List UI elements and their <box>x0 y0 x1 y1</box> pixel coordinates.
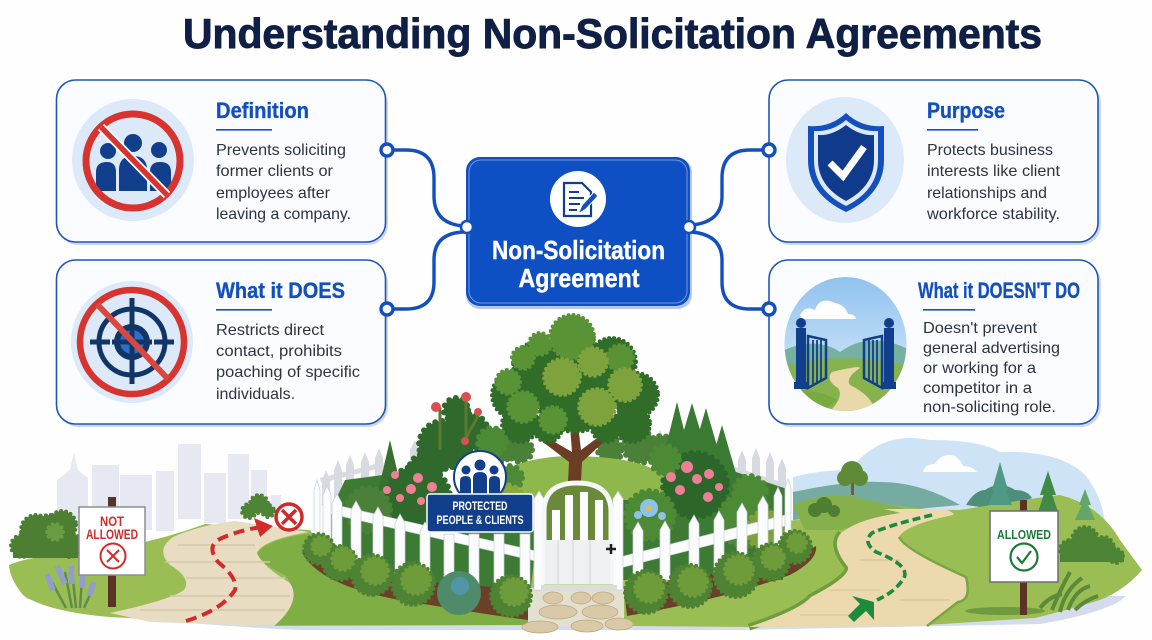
text: what it does body: individuals. <box>216 386 295 403</box>
heading: what it does: What it DOES <box>216 278 345 303</box>
heading: purpose: Purpose <box>927 98 1005 123</box>
lavender <box>47 566 94 608</box>
text: what it doesn't do body: Doesn't prevent <box>923 320 1038 337</box>
garden fill behind fence <box>330 460 790 605</box>
panel: what it doesn't do <box>769 260 1101 427</box>
sign: allowed: ALLOWED <box>997 527 1051 542</box>
sign: protected people and clients: PROTECTED <box>452 501 508 513</box>
panel: center agreement <box>461 157 695 309</box>
text: what it does body: Restricts direct <box>216 322 325 339</box>
text: what it doesn't do body: general advertising <box>923 340 1060 357</box>
path: right walkway <box>749 509 968 627</box>
plant: right bushes <box>626 491 783 548</box>
city skyline <box>57 444 281 531</box>
title: Understanding Non-Solicitation Agreements <box>183 10 1042 57</box>
text: definition body <box>216 142 351 223</box>
landscape: right details <box>749 461 1124 627</box>
arrow: red dashed <box>186 518 273 621</box>
mulch bed <box>302 546 816 620</box>
gate posts <box>794 318 896 389</box>
text: what it doesn't do body: non-soliciting role. <box>923 399 1056 416</box>
stepping stones <box>522 592 633 633</box>
tree foliage <box>492 315 658 442</box>
landscape: left details <box>11 495 530 626</box>
flowers: pink left <box>383 471 437 505</box>
text: purpose body: workforce stability. <box>926 206 1060 223</box>
bush small <box>242 495 274 518</box>
connector nodes <box>381 144 775 315</box>
connectors <box>392 150 764 309</box>
sign: not allowed <box>79 497 145 607</box>
sign: allowed <box>990 500 1058 615</box>
back shrubs <box>481 431 676 464</box>
text: purpose body <box>926 142 1061 223</box>
arrow: green dashed <box>848 515 932 622</box>
text: what it does body <box>216 322 360 403</box>
text: what it doesn't do body: competitor in a <box>923 380 1032 397</box>
text: purpose body: interests like client <box>927 163 1061 180</box>
icon: document and pen <box>550 171 606 227</box>
heading: center label <box>492 235 665 293</box>
heading: center label: Agreement <box>518 263 640 293</box>
text: what it does body: poaching of specific <box>216 364 360 381</box>
text: purpose body: Protects business <box>927 142 1053 159</box>
text: definition body: former clients or <box>216 163 334 180</box>
text: definition body: employees after <box>216 185 331 202</box>
icon: open gate <box>784 277 906 411</box>
plant: fern <box>651 402 766 517</box>
white fence <box>314 479 791 590</box>
stone area <box>528 588 624 626</box>
trees and bushes <box>808 461 1124 615</box>
text: definition body: Prevents soliciting <box>216 142 346 159</box>
text: what it does body: contact, prohibits <box>216 343 342 360</box>
landscape: sky and far hills right <box>793 438 1105 530</box>
text: purpose body: relationships and <box>927 185 1047 202</box>
icon: no target <box>71 281 193 403</box>
garden: protected area <box>302 315 816 633</box>
ground shadow <box>24 590 1126 630</box>
heading: center label: Non-Solicitation <box>492 235 665 265</box>
sign: not allowed: NOT <box>100 514 125 529</box>
panel: purpose <box>769 80 1101 245</box>
shrubs <box>304 531 811 616</box>
heading: what it doesn't do: What it DOESN'T DO <box>918 278 1080 303</box>
ground base <box>9 495 1142 627</box>
hill <box>480 456 700 540</box>
back fence <box>320 430 786 505</box>
icon: red x marker <box>276 504 302 530</box>
sign: protected people and clients <box>427 451 533 532</box>
path: left walkway <box>110 521 309 626</box>
text: what it doesn't do body <box>923 320 1060 416</box>
plant: left bushes <box>346 440 525 532</box>
flower: blue <box>634 499 666 520</box>
bush left <box>11 511 82 558</box>
plant: red flowers <box>409 392 522 490</box>
gate <box>541 483 617 591</box>
text: definition body: leaving a company. <box>216 206 351 223</box>
sign: protected people and clients: PEOPLE & CLIENTS <box>436 515 524 527</box>
icon: shield <box>786 97 904 223</box>
heading: definition: Definition <box>216 98 309 123</box>
sign: not allowed: ALLOWED <box>86 527 138 542</box>
panel: definition <box>56 80 388 245</box>
icon: no people <box>72 99 194 221</box>
panel: what it does <box>56 260 388 427</box>
tree trunk <box>530 421 622 482</box>
flowers: pink right <box>666 461 723 502</box>
text: what it doesn't do body: or working for a <box>923 360 1036 377</box>
